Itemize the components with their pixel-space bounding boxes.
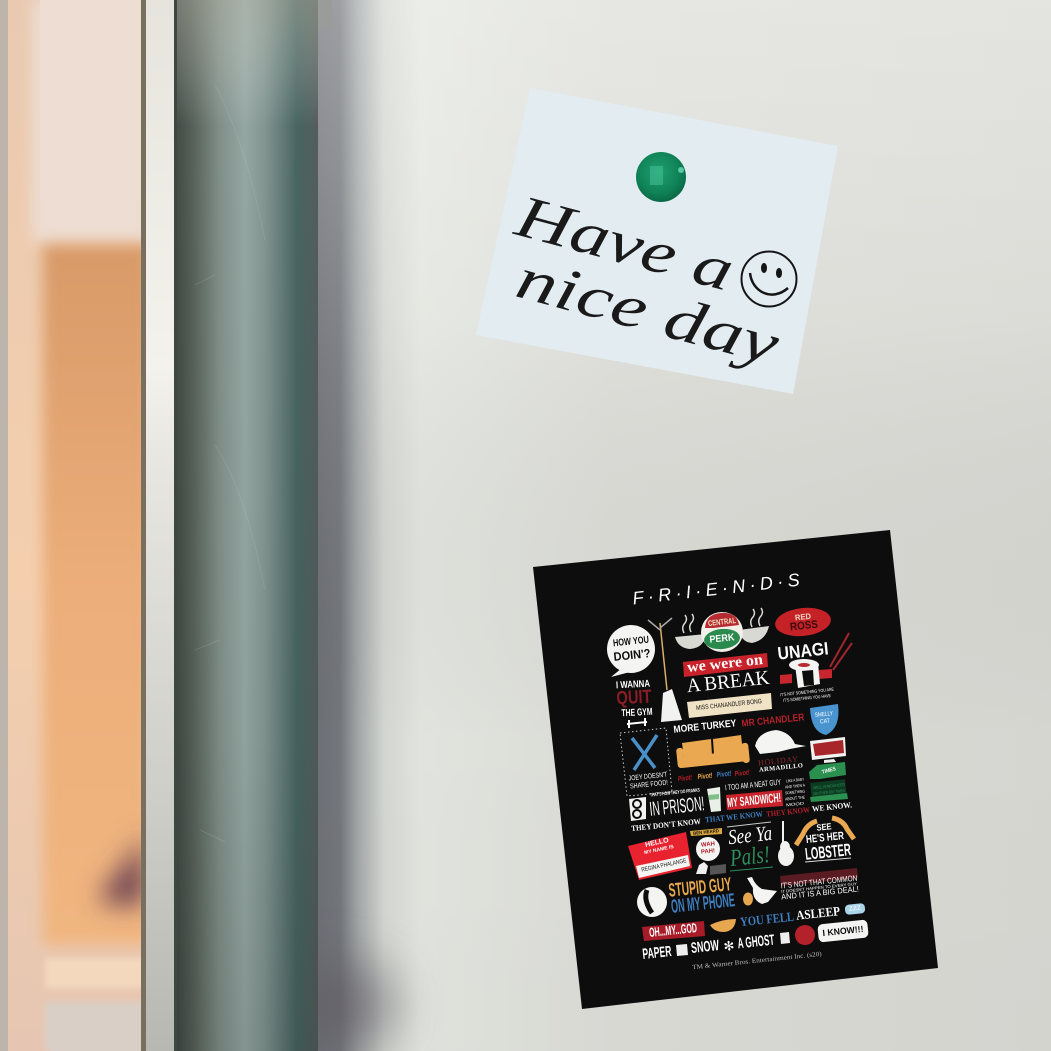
- see ya pals: [727, 821, 773, 872]
- it's not that common: [780, 868, 859, 902]
- logo: central perk: CENTRAL: [708, 616, 736, 628]
- note text: Have a: Have a: [508, 182, 741, 304]
- paper snow a ghost row: [642, 932, 790, 963]
- we were on a break: [683, 652, 771, 697]
- icon: coffee cup: [707, 787, 721, 812]
- magnet: green pin: [636, 152, 686, 202]
- my sandwich: [725, 778, 783, 810]
- it's not that common: IT'S NOT THAT COMMON: [780, 873, 858, 890]
- unagi with sushi and chopsticks: [777, 633, 852, 688]
- icon: smiley: [742, 252, 796, 306]
- paper snow a ghost row: A GHOST: [737, 932, 775, 952]
- they don't know line: WE KNOW.: [812, 800, 852, 814]
- more turkey mr chandler: MR CHANDLER: [741, 712, 806, 730]
- icon: orange cup: [710, 919, 736, 932]
- name plate: miss chanandler bong: MISS CHANANDLER BONG: [696, 698, 762, 712]
- paper snow a ghost row: PAPER: [642, 943, 672, 963]
- you fell asleep: [739, 903, 865, 929]
- stupid guy on my phone: [668, 874, 736, 918]
- icon: tv: [810, 737, 846, 763]
- poster magnet: ON MY PHONE: [670, 890, 736, 918]
- icon: square with handcuffs: [629, 797, 646, 821]
- icon: times green card: ANOTHER DAY TIMES: [813, 788, 845, 796]
- he's her lobster: [796, 818, 854, 864]
- pivot text: Pivot!: [697, 771, 713, 781]
- in prison: IN PRISON!: [649, 793, 705, 821]
- see ya pals: See Ya: [727, 821, 773, 849]
- name plate: miss chanandler bong: [687, 693, 772, 718]
- column of small print: ABOUT THE: [785, 794, 805, 802]
- unagi with sushi and chopsticks: UNAGI: [777, 638, 829, 664]
- football: red ross: [774, 605, 832, 639]
- note text: nice day: nice day: [510, 244, 786, 378]
- more turkey mr chandler: MORE TURKEY: [673, 718, 737, 736]
- it's not that common: IT DOESN'T HAPPEN TO EVERY GUY: [781, 881, 857, 894]
- paper note: [476, 88, 838, 394]
- icon: holiday armadillo: ARMADILLO: [759, 762, 803, 774]
- ben heard, wah pah, monkey: WAH: [701, 841, 715, 849]
- dotted box: joey doesn't share food: SHARE FOOD!: [630, 780, 668, 790]
- small caption: [780, 687, 834, 703]
- icon: holiday armadillo: HOLIDAY: [758, 754, 799, 768]
- they don't know line: THEY KNOW: [766, 805, 810, 819]
- icon: holiday armadillo: [755, 730, 806, 774]
- they don't know line: [631, 800, 852, 833]
- in prison: THAT'S HOW THEY DO PRANKS: [650, 787, 701, 799]
- you fell asleep: YOU FELL: [739, 909, 795, 929]
- red stamp circle: [795, 925, 815, 945]
- we were on a break: we were on: [686, 652, 764, 676]
- title: F·R·I·E·N·D·S: [631, 570, 801, 608]
- my sandwich: I TOO AM A NEAT GUY: [725, 778, 782, 792]
- ben heard, wah pah, monkey: [690, 828, 726, 875]
- we were on a break: A BREAK: [686, 667, 771, 697]
- poster magnet: [533, 530, 938, 1009]
- my sandwich: MY SANDWICH!: [726, 790, 782, 810]
- name tag: hello my name is: MY NAME IS: [644, 844, 675, 856]
- copyright: TM & Warner Bros. Entertainment Inc. (s20): [692, 951, 822, 971]
- name tag: hello my name is: HELLO: [645, 837, 670, 849]
- small caption: IT'S SOMETHING YOU HAVE: [783, 693, 831, 703]
- text: I wanna quit the gym: THE GYM: [621, 707, 653, 719]
- football: red ross: RED: [795, 612, 812, 622]
- column of small print: SOMETHING: [785, 788, 805, 796]
- column of small print: AND THEN A: [785, 782, 805, 790]
- football: red ross: ROSS: [789, 619, 819, 633]
- it's not that common: AND IT IS A BIG DEAL!: [781, 884, 859, 902]
- name tag: hello my name is: REGINA PHALANGE: [641, 858, 687, 874]
- you fell asleep: ASLEEP: [795, 903, 841, 923]
- more turkey mr chandler: [673, 712, 806, 736]
- text: I wanna quit the gym: QUIT: [616, 687, 652, 709]
- ben heard, wah pah, monkey: BEN HEARD: [693, 828, 720, 836]
- stupid guy on my phone: STUPID GUY: [668, 874, 733, 902]
- icon: smelly cat: SMELLY: [815, 711, 833, 719]
- icon: phone circle: [637, 887, 667, 917]
- banner: oh my god: [642, 920, 705, 941]
- you fell asleep: ZZZ: [849, 905, 862, 913]
- speech bubble: i know: I KNOW!!!: [822, 924, 864, 938]
- background: blurred room: [0, 0, 150, 1051]
- they don't know line: THAT WE KNOW: [705, 809, 763, 825]
- icon: smelly cat: CAT: [820, 718, 831, 726]
- pivot text: [678, 768, 750, 783]
- pivot text: Pivot!: [716, 769, 732, 779]
- icon: smelly cat: [810, 704, 838, 735]
- icon: times green card: [809, 762, 848, 802]
- column of small print: [785, 777, 805, 807]
- he's her lobster: LOBSTER: [804, 840, 852, 864]
- banner: oh my god: OH...MY...GOD: [648, 920, 698, 940]
- icon: times green card: WELL ANNOUNCED: [813, 782, 845, 790]
- speech bubble: how you doin: DOIN'?: [613, 646, 651, 664]
- small caption: IT'S NOT SOMETHING YOU ARE: [780, 687, 834, 697]
- door handle bar: [141, 0, 178, 1051]
- speech bubble: how you doin: [607, 625, 655, 677]
- see ya pals: Pals!: [728, 842, 771, 872]
- dark steel column: [177, 0, 332, 1051]
- name tag: hello my name is: [628, 832, 692, 880]
- speech bubble: how you doin: HOW YOU: [613, 635, 649, 649]
- icon: orange sofa: [676, 735, 750, 768]
- they don't know line: THEY DON'T KNOW: [631, 817, 701, 833]
- paper snow a ghost row: ✻: [723, 938, 735, 954]
- logo: central perk: PERK: [709, 632, 736, 646]
- in prison: [649, 787, 705, 821]
- column of small print: MOOD: [786, 801, 804, 807]
- icon: goose and bread: [743, 877, 777, 906]
- text: I wanna quit the gym: I WANNA: [616, 679, 650, 691]
- logo: central perk: [675, 608, 769, 652]
- speech bubble: i know: [817, 919, 869, 943]
- he's her lobster: SEE: [816, 821, 832, 833]
- dotted box: joey doesn't share food: JOEY DOESN'T: [628, 771, 668, 783]
- pivot text: Pivot!: [678, 773, 693, 783]
- he's her lobster: HE'S HER: [805, 830, 845, 846]
- paper snow a ghost row: SNOW: [690, 937, 720, 957]
- icon: times green card: TIMES: [821, 766, 837, 776]
- dotted box: joey doesn't share food: [620, 728, 672, 796]
- icon: broom: [648, 618, 682, 722]
- pivot text: Pivot!: [734, 768, 750, 778]
- column of small print: LIKE A BABY: [786, 777, 804, 783]
- ben heard, wah pah, monkey: PAH!: [701, 848, 715, 856]
- fridge door surface: [295, 0, 1051, 1051]
- icon: guitar: [778, 821, 794, 866]
- text: I wanna quit the gym: [616, 679, 653, 728]
